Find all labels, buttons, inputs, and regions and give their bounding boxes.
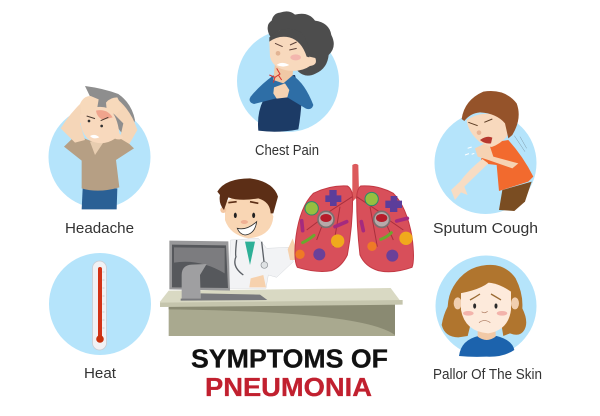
- icon: person with chest pain: [250, 11, 334, 132]
- icon: man with headache: [61, 86, 137, 209]
- doctor: [217, 178, 296, 288]
- label: pallor of the skin: Pallor Of The Skin: [433, 367, 542, 383]
- chest pain circle: [237, 30, 339, 132]
- right lung: [357, 186, 413, 272]
- panel: heat: [49, 253, 151, 382]
- panel: headache: [48, 86, 150, 237]
- title line 2: PNEUMONIA: [205, 372, 372, 402]
- pallor circle: [436, 256, 536, 356]
- label: sputum cough: Sputum Cough: [433, 221, 538, 237]
- lungs with germs: [295, 164, 413, 272]
- panel: pallor of the skin: [433, 256, 542, 383]
- desk: [160, 288, 403, 336]
- icon: coughing boy: [451, 91, 533, 211]
- label: heat: Heat: [84, 366, 116, 382]
- heat circle: [49, 253, 151, 355]
- panel: sputum cough: [433, 91, 538, 237]
- title line 1: SYMPTOMS OF: [191, 344, 388, 374]
- headache circle: [48, 106, 150, 208]
- label: chest pain: Chest Pain: [255, 143, 319, 159]
- computer monitor: [169, 241, 267, 301]
- germs: [295, 190, 413, 262]
- title: [191, 344, 388, 402]
- sputum cough circle: [434, 112, 536, 214]
- label: headache: Headache: [65, 221, 134, 237]
- icon: pale girl: [442, 265, 526, 357]
- windpipe: [345, 164, 367, 205]
- icon: thermometer: [92, 261, 106, 350]
- panel: chest pain: [237, 11, 339, 159]
- left lung: [295, 186, 353, 271]
- panel: doctor at desk: [160, 178, 403, 336]
